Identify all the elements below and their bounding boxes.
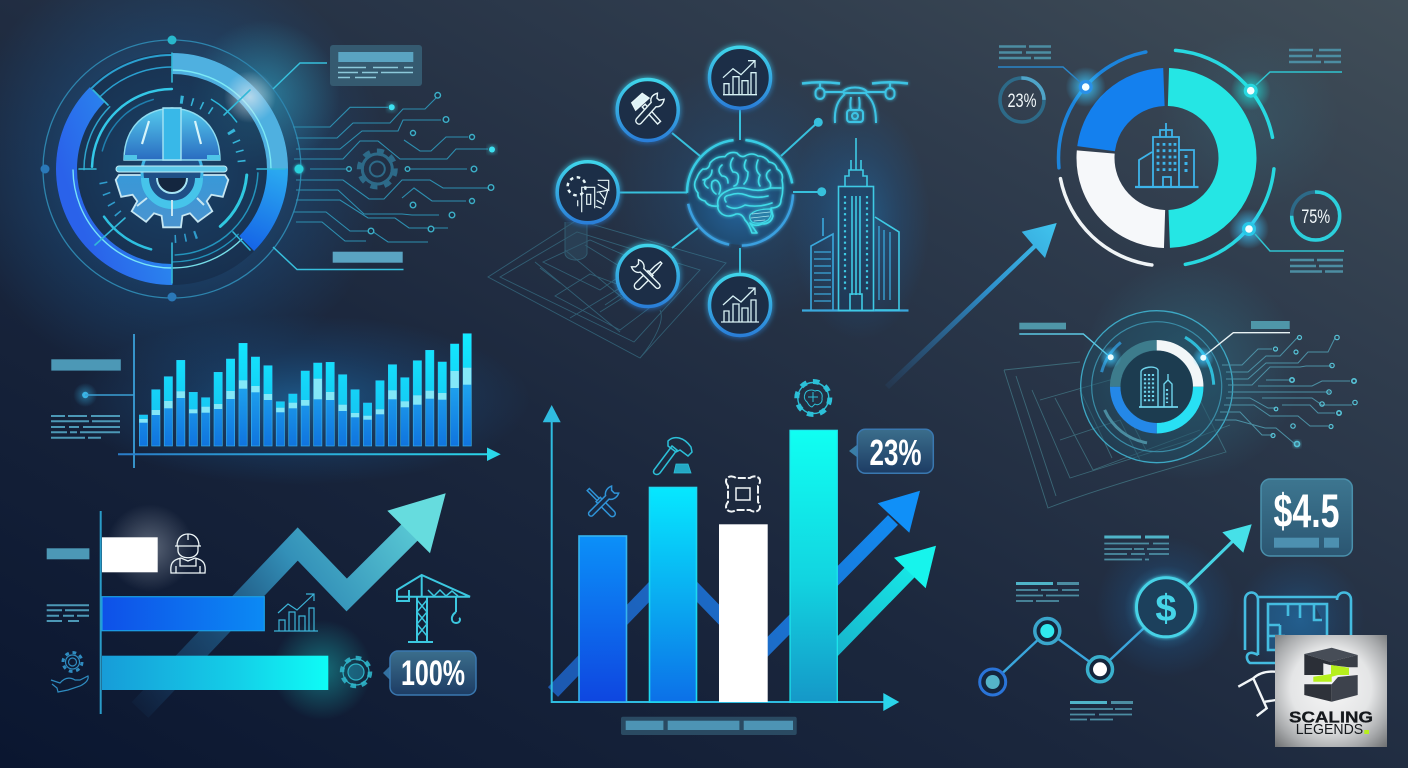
icon: skyscraper cluster [802,138,908,310]
node 2 [1035,618,1060,644]
icon: twin towers [1139,367,1178,407]
label block [51,359,134,438]
panel: mini building radial [1004,309,1357,508]
icon: frame selection [726,476,760,512]
ring chart segments [1115,345,1198,428]
icon: wrench and screwdriver node [617,246,678,306]
brain hub circle [677,130,803,256]
stat ring 23% [1000,78,1044,122]
panel: financial growth line [980,479,1352,720]
callout: 100%: 100% [401,654,465,693]
icon: blueprint scroll [1245,592,1351,663]
vertical axis [100,511,102,714]
panel: horizontal bars with growth arrow [47,493,476,720]
node teal top [1231,71,1271,111]
icon: office building [1135,123,1198,187]
axes [543,405,899,711]
bar: white [102,537,158,572]
icon: hammer and wrench node [617,80,678,140]
icon: tower crane [397,575,470,642]
stat ring 75% [1292,192,1340,240]
network connector lines [618,76,825,286]
icon: brain [695,152,783,233]
donut outer arcs [1045,36,1288,280]
cyan bar glow [272,620,372,720]
node and leader right [1192,321,1290,369]
icon: worker [171,534,205,573]
axes [118,334,501,468]
callout: 23%: 23% [870,432,922,473]
value card: $4.5 [1274,484,1340,537]
callout: 23% [849,429,933,473]
dollar node [1124,565,1208,649]
axis legend bar [621,717,797,735]
dollar node: $ [1155,588,1177,630]
icon: chart [274,594,318,631]
icon: plan and gear node [557,162,618,223]
icon: hammer [654,438,692,474]
icon: crossed tools [585,485,619,520]
node and leader left [1019,323,1122,368]
bar: cyan [102,656,328,690]
logo mark [1304,648,1358,702]
donut segments [1086,78,1247,238]
callout: lower label bar [273,247,404,270]
callout: upper label box [273,45,422,89]
label placeholders [47,548,89,621]
zigzag blue arrow [553,491,920,692]
logo wordmark: SCALING [1289,709,1373,726]
column 4 [790,430,837,702]
circuit nodes [347,92,495,234]
icon: drone [802,82,908,123]
icon: hard hat over gear [116,108,228,227]
column 2 [650,488,696,702]
column 1 [579,536,626,702]
icon: white compass partly hidden [1238,672,1276,716]
node 3 [1088,657,1112,682]
panel: donut chart with city icon [885,36,1344,389]
emblem thick ring segments [56,53,288,285]
logo: Scaling Legends [1275,635,1387,747]
icon: gear with hand [51,652,88,692]
leader and text lower right [1255,234,1344,272]
circuit end nodes [1271,335,1357,446]
node teal bottom [1229,209,1269,249]
circuit traces [1215,337,1352,444]
white bar glow [106,504,194,592]
outer ring with four dots [40,36,304,302]
panel: AI brain network [488,47,908,358]
inner rings and ticks [11,8,333,330]
rings [1079,309,1235,465]
blueprint sketch behind network [488,220,726,358]
panel: safety helmet emblem [11,8,495,330]
panel: central column chart [543,382,936,735]
teal arrow [830,546,936,654]
icon: chart node bottom [710,274,770,336]
icon: gear on circuit [360,152,394,186]
stat ring 23%: 23% [1008,91,1037,112]
bar: blue [102,597,264,631]
circuit traces [293,98,488,242]
growth arrow to value [1188,524,1252,585]
trend line [993,607,1166,682]
leader and text upper left [998,46,1080,82]
blueprint sketch [1004,360,1230,508]
node 1 [980,669,1006,695]
icon: gear with brain [797,382,830,414]
panel: multi bar chart [51,334,501,468]
zigzag growth arrow [140,493,446,710]
node blue [1066,67,1106,107]
value card [1261,479,1352,556]
icon: gear with building [342,658,370,686]
stat ring 75%: 75% [1301,207,1330,228]
icon: chart node top [710,47,770,108]
leader and text upper right [1256,50,1342,85]
column 3 [719,524,768,702]
text placeholders [1016,537,1169,720]
callout: 100% [383,651,476,695]
big diagonal arrow [885,223,1057,389]
bars [139,334,471,446]
logo: Scaling Legends: LEGENDS [1296,722,1363,738]
